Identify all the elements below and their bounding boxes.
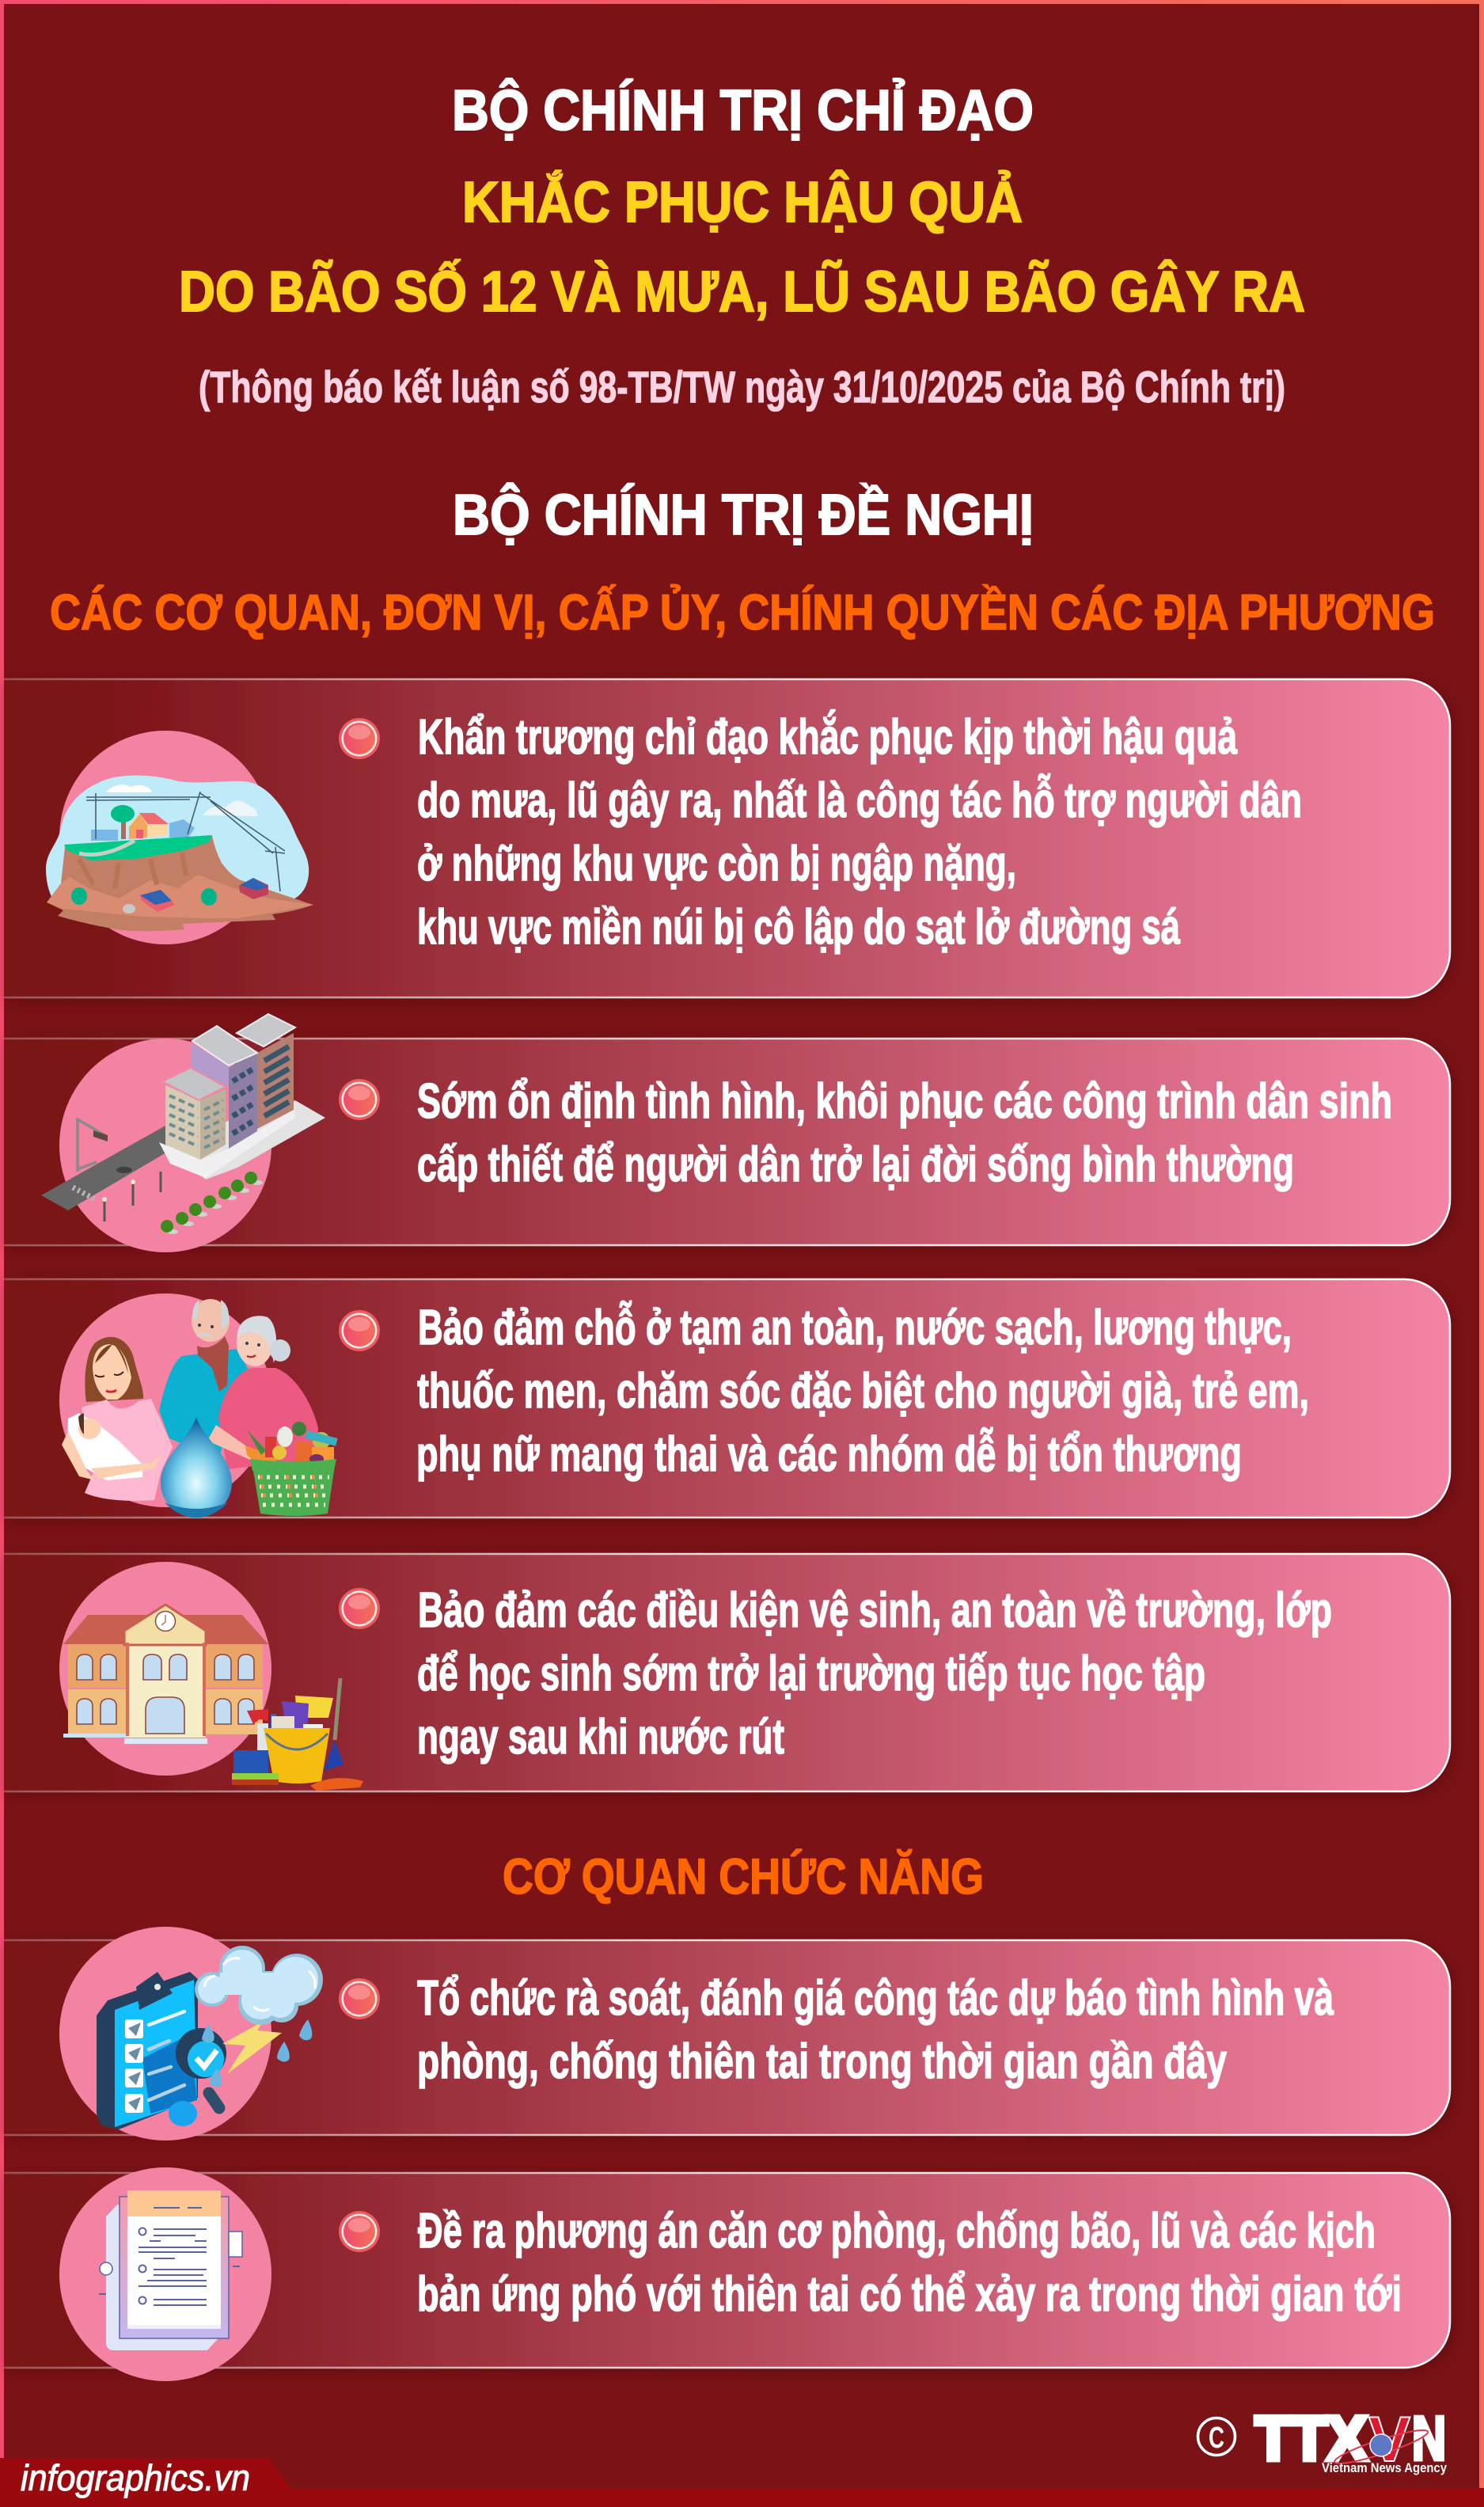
logo: TTXVN: V	[1368, 2404, 1410, 2475]
title line 2: KHẮC PHỤC HẬU QUẢ	[462, 170, 1023, 234]
right border stripe	[1479, 0, 1484, 2490]
bullet 4	[339, 1588, 380, 1629]
card 4 text	[417, 1583, 1332, 1764]
card 1 background	[4, 679, 1450, 997]
bullet 5	[339, 1978, 380, 2019]
card 6 background	[4, 2173, 1450, 2368]
logo: TTXVN: Vietnam News Agency	[1322, 2460, 1447, 2475]
logo: TTXVN	[1255, 2403, 1447, 2475]
icon: checklist and storm cloud	[59, 1927, 323, 2140]
icon: plan document	[59, 2167, 271, 2381]
card 5 background	[4, 1940, 1450, 2135]
left border stripe	[0, 0, 4, 2462]
panel: card 1 landslide recovery	[4, 679, 1450, 997]
logo: TTXVN: TTX	[1255, 2403, 1367, 2473]
card 1 text	[417, 710, 1302, 955]
panel: card 5 review forecasting	[4, 1927, 1450, 2140]
section heading: functional agencies: CƠ QUAN CHỨC NĂNG	[503, 1849, 984, 1905]
title block	[179, 78, 1305, 412]
icon: buildings and street	[41, 1014, 325, 1252]
icon: school and cleaning supplies	[59, 1562, 363, 1791]
icon: landslide scene	[46, 731, 313, 944]
bullet 3	[339, 1310, 380, 1351]
logo: TTXVN: N	[1412, 2403, 1446, 2473]
footer site name: infographics.vn	[21, 2457, 250, 2498]
card 2 text	[417, 1074, 1392, 1192]
card 2 background	[4, 1039, 1450, 1245]
card 5 text	[417, 1971, 1334, 2089]
card 4 background	[4, 1554, 1450, 1791]
bullet 2	[339, 1079, 380, 1120]
icon: family, water drop and food basket	[59, 1293, 338, 1517]
top border stripe	[0, 0, 1484, 4]
copyright symbol	[1198, 2418, 1235, 2456]
card 3 background	[4, 1279, 1450, 1517]
card 4 text: ngay sau khi nước rút	[417, 1710, 784, 1764]
panel: card 3 shelter and care	[4, 1279, 1450, 1517]
title line 3: DO BÃO SỐ 12 VÀ MƯA, LŨ SAU BÃO GÂY RA	[179, 259, 1305, 324]
bullet 1	[339, 718, 380, 759]
footer band	[0, 2458, 1484, 2507]
card 1 text: ở những khu vực còn bị ngập nặng,	[417, 837, 1016, 891]
panel: card 4 schools	[4, 1554, 1450, 1791]
title line 1: BỘ CHÍNH TRỊ CHỈ ĐẠO	[452, 78, 1034, 142]
panel: card 6 response plans	[4, 2167, 1450, 2381]
heading: Bộ Chính trị đề nghị: BỘ CHÍNH TRỊ ĐỀ NGHỊ	[453, 483, 1034, 547]
bullet 6	[339, 2211, 380, 2252]
card 3 text	[416, 1301, 1309, 1482]
card 5 text: phòng, chống thiên tai trong thời gian gần đây	[417, 2034, 1227, 2089]
copyright symbol: C	[1209, 2422, 1224, 2455]
panel: card 2 restore infrastructure	[4, 1014, 1450, 1252]
card 1 text: khu vực miền núi bị cô lập do sạt lở đường sá	[417, 900, 1180, 955]
card 6 text	[417, 2204, 1402, 2322]
